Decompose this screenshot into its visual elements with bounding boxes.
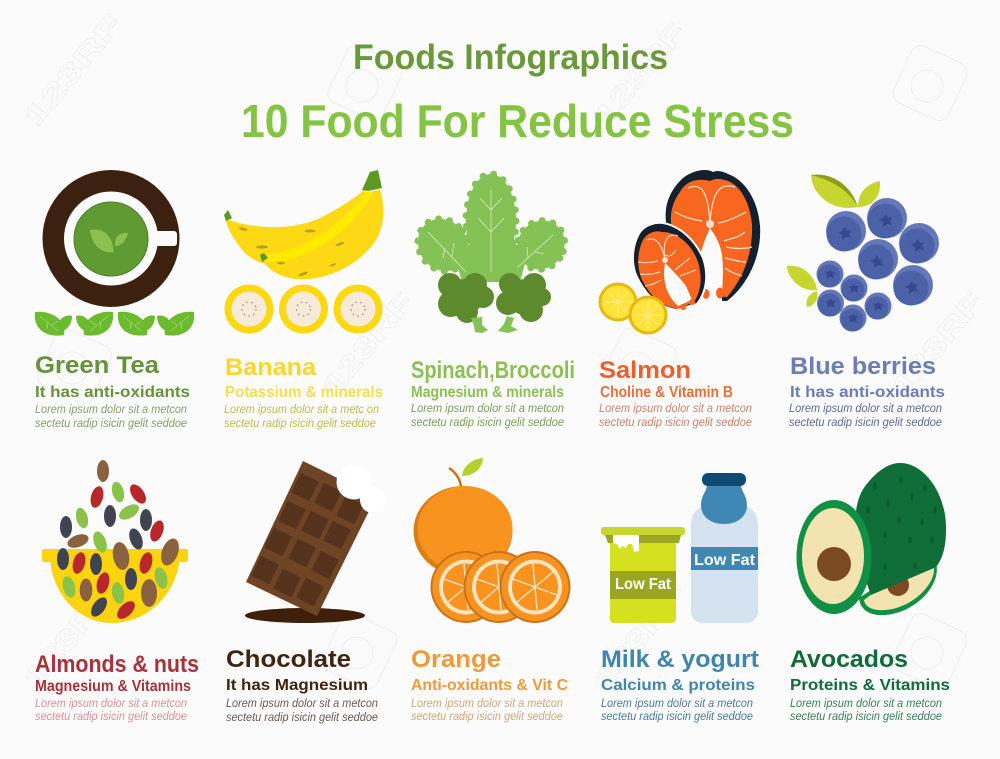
lemon slices (598, 282, 638, 322)
card text: Avocados (790, 646, 950, 723)
top leaves (811, 175, 858, 208)
body text: Lorem ipsum dolor sit a metcon (35, 698, 187, 710)
yogurt label (610, 571, 676, 599)
yogurt label text: Low Fat (615, 576, 671, 593)
bottle milk neck (701, 483, 747, 524)
highlight stripe (262, 191, 374, 262)
food name: Almonds & nuts (35, 651, 199, 678)
big steak outline (666, 170, 760, 301)
front half flesh (802, 508, 864, 604)
whole orange (414, 486, 512, 576)
row of leaves (35, 312, 194, 336)
whole avocado (855, 463, 946, 595)
card text: Blue berries (789, 353, 945, 429)
bottle cap (702, 473, 746, 486)
bowl (50, 549, 180, 623)
rear pit (887, 574, 909, 596)
card text: Banana (224, 354, 383, 430)
cream drip (613, 535, 639, 552)
card text: Chocolate (226, 646, 378, 724)
food name: Milk & yogurt (601, 646, 759, 673)
watermark layer: 123RF (18, 578, 122, 694)
body text: sectetu radip isicin gelit seddoe (789, 417, 942, 429)
body text (601, 698, 753, 723)
icon: banana (224, 170, 383, 334)
icon: salmon steaks (598, 170, 760, 334)
watermark layer: 123RF (588, 578, 692, 694)
skin spots (866, 476, 937, 570)
body text (599, 403, 752, 429)
big steak hollow (697, 228, 723, 303)
banana slices (224, 284, 382, 334)
rear half rim (859, 563, 937, 615)
body text: sectetu radip isicin gelit seddoe (790, 711, 942, 723)
benefit: Anti-oxidants & Vit C (411, 677, 568, 694)
icon: bowl of nuts (42, 460, 188, 623)
small steak hollow (664, 263, 692, 306)
watermark layer: 123RF (316, 286, 420, 402)
body text: Lorem ipsum dolor sit a metcon (411, 403, 564, 415)
benefit: It has anti-oxidants (790, 384, 945, 401)
big steak flesh (671, 179, 752, 297)
body text: Lorem ipsum dolor sit a metcon (226, 698, 378, 710)
stem (449, 468, 461, 487)
body text: sectetu radip isicin gelit seddoe (224, 418, 376, 430)
watermark layer: 123RF (588, 16, 692, 132)
body text: sectetu radip isicin gelit seddoe (599, 417, 752, 429)
beans (57, 460, 182, 622)
rear half flesh (864, 568, 934, 610)
body text (35, 698, 187, 723)
big berries (826, 198, 939, 306)
body text: Lorem ipsum dolor sit a metcon (790, 698, 942, 710)
body text (411, 403, 564, 429)
big steak fat lines (675, 186, 752, 276)
food name: Green Tea (35, 352, 160, 379)
icon: green tea cup (35, 170, 194, 336)
bottle label (691, 547, 758, 570)
body text (226, 698, 378, 724)
watermark layer: 123RF (886, 286, 990, 402)
body text: sectetu radip isicin gelit seddoe (35, 711, 187, 723)
benefit: It has anti-oxidants (35, 384, 190, 401)
benefit: Magnesium & Vitamins (35, 678, 191, 695)
food name: Chocolate (226, 646, 351, 673)
yogurt lid (601, 527, 685, 535)
benefit: Magnesium & minerals (411, 384, 564, 401)
saucer (42, 170, 180, 307)
body text (411, 698, 563, 723)
body text (789, 403, 942, 429)
body text: Lorem ipsum dolor sit a metcon (601, 698, 753, 710)
food name: Salmon (599, 357, 691, 384)
leaf (462, 458, 483, 476)
front banana (260, 190, 383, 279)
bite mark (336, 464, 372, 500)
card text: Milk & yogurt (601, 646, 759, 723)
front half rim (796, 500, 872, 614)
benefit: Proteins & Vitamins (790, 677, 950, 694)
body text (224, 404, 379, 430)
icon: avocado (796, 463, 946, 615)
body text (790, 698, 942, 723)
body text: Lorem ipsum dolor sit a metcon (789, 403, 942, 415)
icon: milk and yogurt (601, 473, 758, 623)
bowl rim (42, 549, 188, 562)
benefit: Potassium & minerals (225, 384, 383, 401)
body text: Lorem ipsum dolor sit a metcon (599, 403, 752, 415)
body text (35, 404, 187, 430)
small berries (816, 260, 892, 332)
body text: Lorem ipsum dolor sit a metc on (224, 404, 379, 416)
broccoli stems (471, 316, 518, 333)
benefit: Calcium & proteins (601, 677, 755, 694)
cup handle (150, 231, 177, 246)
spots (238, 226, 345, 277)
card text: Spinach, Broccoli (411, 357, 575, 429)
heading: 10 Food For Reduce Stress: 10 Food For Reduce Stress (241, 95, 794, 147)
side leaves (787, 266, 817, 290)
benefit: Choline & Vitamin B (600, 384, 733, 401)
rear banana (226, 190, 370, 266)
broccoli florets (438, 273, 551, 323)
icon: chocolate bar (245, 461, 386, 623)
food name: Orange (411, 646, 501, 673)
card text: Orange (411, 646, 568, 723)
small steak fat lines (638, 235, 696, 286)
bottle label text: Low Fat (694, 552, 756, 569)
floating leaf (90, 230, 128, 252)
body text: sectetu radip isicin gelit seddoe (35, 418, 187, 430)
food name: Banana (225, 354, 317, 381)
icon: blueberries (787, 175, 939, 332)
heading: Foods Infographics: Foods Infographics (353, 38, 668, 77)
front pit (817, 547, 851, 581)
spinach leaves (408, 174, 574, 281)
food name: Blue berries (790, 353, 936, 380)
orange slices (430, 551, 502, 623)
food name: Avocados (790, 646, 908, 673)
yogurt cup (610, 543, 676, 623)
bar squares (251, 473, 364, 606)
food name: Spinach,Broccoli (411, 357, 575, 384)
yogurt lid shadow (605, 535, 681, 543)
card text: Green Tea (35, 352, 190, 430)
body text: Lorem ipsum dolor sit a metcon (35, 404, 187, 416)
leaf join (452, 245, 530, 282)
icon: orange (414, 458, 570, 623)
melted puddle (245, 608, 365, 623)
cup (64, 192, 158, 286)
bar (246, 461, 376, 616)
body text: sectetu radip isicin gelit seddoe (601, 711, 753, 723)
small steak flesh (638, 231, 701, 309)
body text: sectetu radip isicin gelit seddoe (411, 417, 564, 429)
tea (74, 202, 148, 276)
card text: Salmon (599, 357, 752, 429)
body text: Lorem ipsum dolor sit a metcon (411, 698, 563, 710)
small steak outline (633, 223, 706, 310)
benefit: It has Magnesium (226, 677, 368, 694)
body text: sectetu radip isicin gelit seddoe (411, 711, 563, 723)
card text: Almonds & nuts (35, 651, 199, 723)
stem and tips (362, 170, 382, 191)
watermark layer: 123RF (18, 9, 128, 132)
body text: sectetu radip isicin gelit seddoe (226, 712, 378, 724)
icon: spinach and broccoli (408, 174, 574, 333)
leaf veins (428, 190, 553, 272)
bottle body (691, 507, 758, 623)
